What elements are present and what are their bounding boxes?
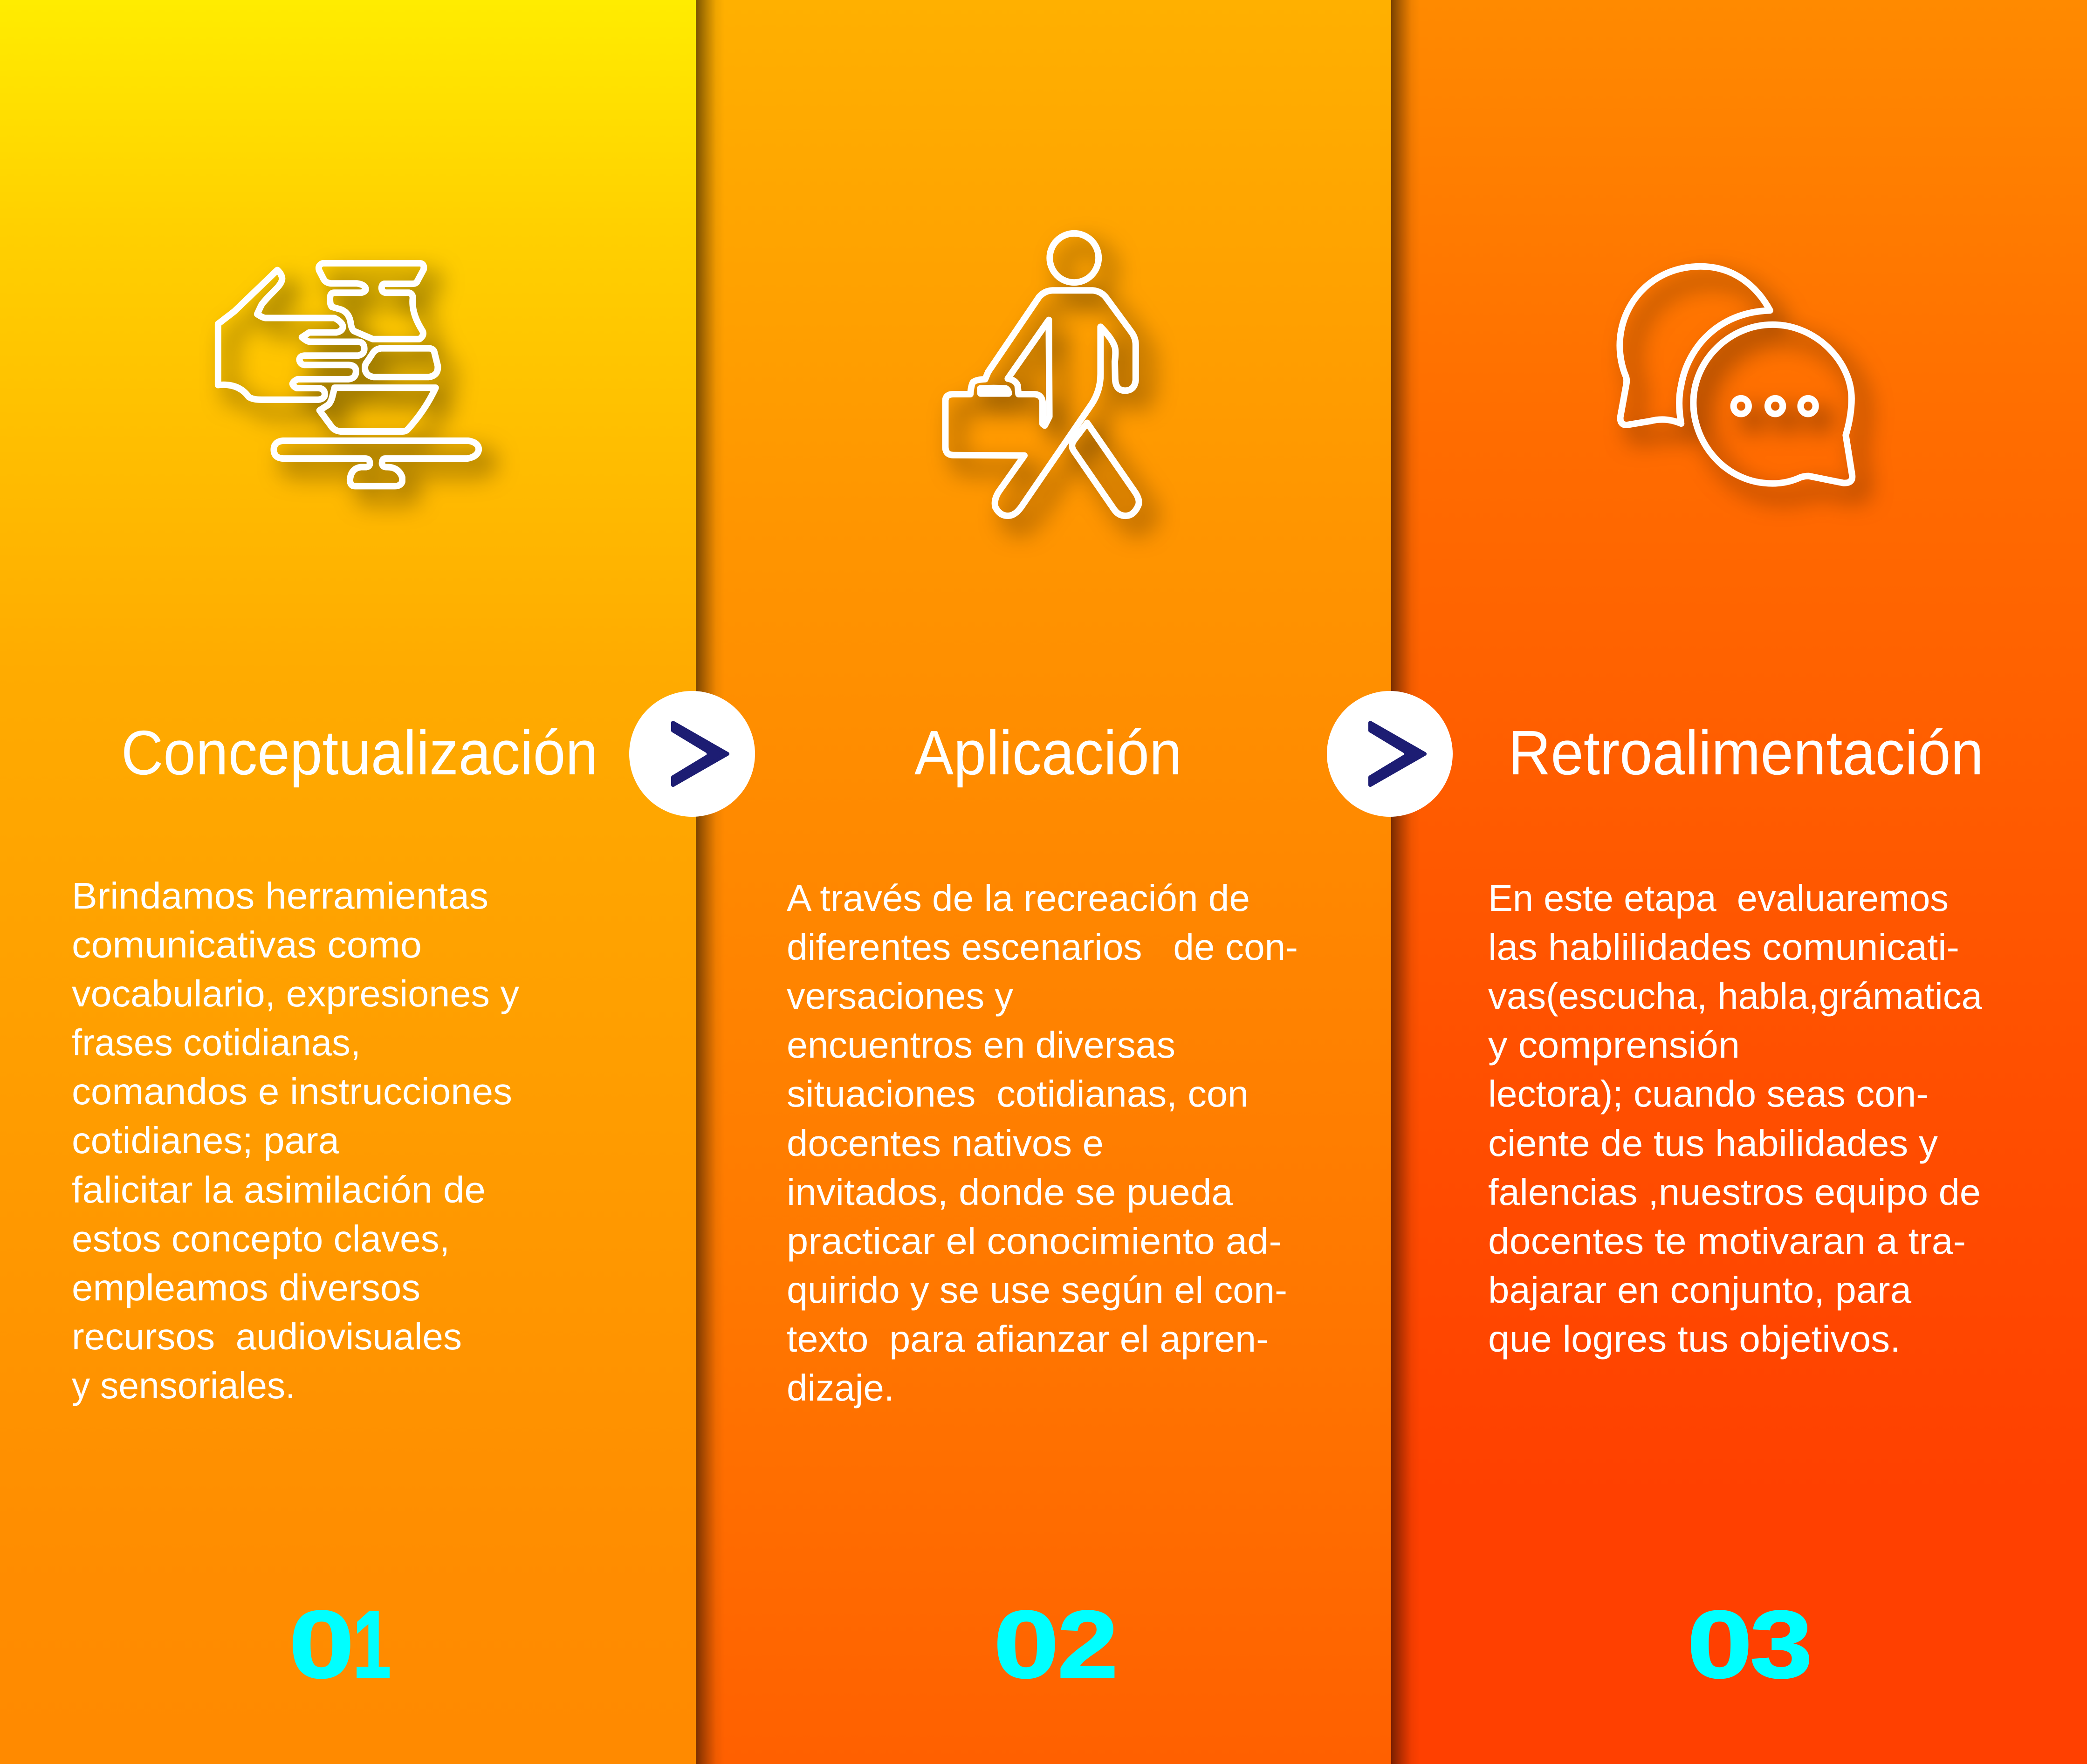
text block: aplicación description: encuentros en diversas [787, 1024, 1175, 1066]
text block: retroalimentación description: y comprensión [1488, 1024, 1740, 1066]
text block: conceptualización description: cotidianes; para [72, 1120, 340, 1161]
text block: aplicación description: versaciones y [787, 975, 1013, 1017]
text block: retroalimentación description: falencias ,nuestros equipo de [1488, 1171, 1981, 1213]
text block: aplicación description: quirido y se use según el con- [787, 1269, 1287, 1311]
text block: aplicación description: diferentes escenarios de con- [787, 926, 1298, 968]
text block: retroalimentación description: ciente de tus habilidades y [1488, 1122, 1938, 1164]
text block: retroalimentación description: lectora); cuando seas con- [1488, 1073, 1929, 1114]
number: 01 [289, 1591, 391, 1698]
number: 03 [1687, 1591, 1812, 1698]
icon: person walking with briefcase [945, 233, 1139, 516]
text block: aplicación description [787, 877, 1298, 1408]
text block: aplicación description: dizaje. [787, 1367, 894, 1408]
heading: Aplicación: Aplicación [914, 718, 1182, 788]
heading: Conceptualización: Conceptualización [121, 718, 598, 788]
icon: hand shaping pottery [218, 263, 479, 486]
heading: Retroalimentación: Retroalimentación [1508, 718, 1984, 788]
panel: aplicación [696, 0, 1391, 1764]
number: 01: 0 [289, 1591, 354, 1698]
text block: retroalimentación description: que logres tus objetivos. [1488, 1318, 1901, 1360]
text block: retroalimentación description: docentes te motivaran a tra- [1488, 1220, 1966, 1262]
text block: conceptualización description: recursos audiovisuales [72, 1316, 462, 1357]
number: 02: 0 [994, 1591, 1059, 1698]
text block: conceptualización description: Brindamos herramientas [72, 875, 488, 916]
icon: speech bubbles [1620, 267, 1852, 484]
text block: conceptualización description [72, 875, 519, 1406]
number: 03: 3 [1750, 1591, 1812, 1698]
number: 01: 1 [353, 1591, 391, 1698]
text block: conceptualización description: estos concepto claves, [72, 1218, 450, 1259]
text block: aplicación description: situaciones cotidianas, con [787, 1073, 1249, 1114]
text block: conceptualización description: empleamos diversos [72, 1267, 420, 1308]
text block: conceptualización description: y sensoriales. [72, 1365, 295, 1406]
text block: retroalimentación description: bajarar en conjunto, para [1488, 1269, 1912, 1311]
number: 02: 2 [1057, 1591, 1118, 1698]
text block: retroalimentación description [1488, 877, 1982, 1360]
text block: retroalimentación description: las hablilidades comunicati- [1488, 926, 1959, 968]
text block: retroalimentación description: En este etapa evaluaremos [1488, 877, 1949, 919]
text block: conceptualización description: vocabulario, expresiones y [72, 973, 519, 1014]
text block: aplicación description: invitados, donde se pueda [787, 1171, 1233, 1213]
panel: conceptualización [0, 0, 696, 1764]
text block: conceptualización description: falicitar la asimilación de [72, 1169, 486, 1210]
panel: retroalimentación [1391, 0, 2087, 1764]
text block: conceptualización description: comunicativas como [72, 924, 422, 965]
arrow: conceptualización to aplicación [629, 691, 755, 817]
text block: retroalimentación description: vas(escucha, habla,grámatica [1488, 975, 1982, 1017]
text block: aplicación description: practicar el conocimiento ad- [787, 1220, 1282, 1262]
text block: aplicación description: docentes nativos e [787, 1122, 1104, 1164]
text block: aplicación description: texto para afianzar el apren- [787, 1318, 1269, 1360]
text block: conceptualización description: comandos e instrucciones [72, 1071, 512, 1112]
number: 02 [994, 1591, 1118, 1698]
text block: conceptualización description: frases cotidianas, [72, 1022, 361, 1063]
arrow: aplicación to retroalimentación [1327, 691, 1453, 817]
number: 03: 0 [1687, 1591, 1752, 1698]
text block: aplicación description: A través de la recreación de [787, 877, 1250, 919]
